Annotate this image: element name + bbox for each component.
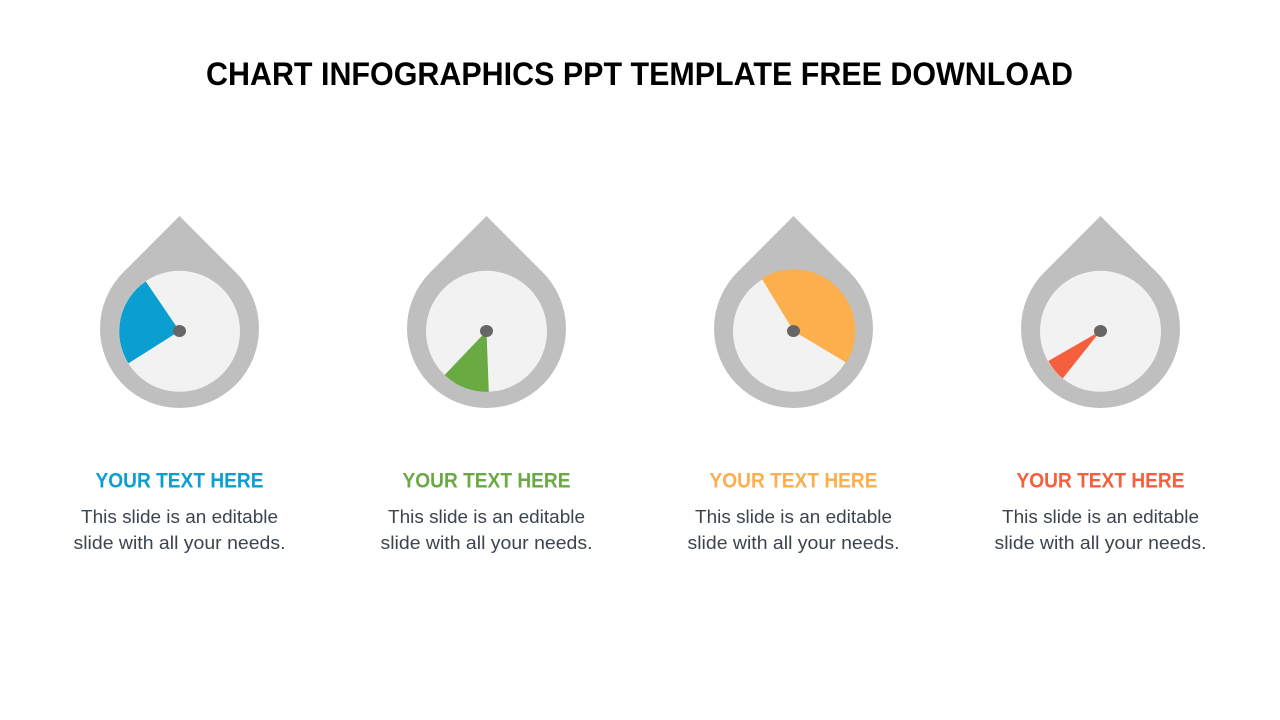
heading: orange: YOUR TEXT HERE xyxy=(710,470,878,492)
panel: red gauge xyxy=(994,216,1206,553)
text block: green: slide with all your needs. xyxy=(380,533,592,553)
text block: blue: This slide is an editable xyxy=(81,507,278,527)
icon: red gauge drop xyxy=(1021,216,1180,408)
text block: orange: slide with all your needs. xyxy=(688,533,900,553)
text block: orange xyxy=(688,507,900,553)
heading: green: YOUR TEXT HERE xyxy=(402,470,570,492)
panel: blue gauge xyxy=(74,216,286,553)
title: CHART INFOGRAPHICS PPT TEMPLATE FREE DOWNLOAD xyxy=(206,56,1073,92)
icon: green gauge drop xyxy=(407,216,566,408)
icon: orange gauge drop xyxy=(714,216,873,408)
heading: blue: YOUR TEXT HERE xyxy=(96,470,264,492)
text block: green xyxy=(380,507,592,553)
text block: red: slide with all your needs. xyxy=(994,533,1206,553)
panel: orange gauge xyxy=(688,216,900,553)
text block: red xyxy=(994,507,1206,553)
heading: red: YOUR TEXT HERE xyxy=(1016,470,1184,492)
text block: blue xyxy=(74,507,286,553)
text block: blue: slide with all your needs. xyxy=(74,533,286,553)
text block: green: This slide is an editable xyxy=(388,507,585,527)
icon: blue gauge drop xyxy=(100,216,259,408)
panel: green gauge xyxy=(380,216,592,553)
text block: red: This slide is an editable xyxy=(1002,507,1199,527)
text block: orange: This slide is an editable xyxy=(695,507,892,527)
